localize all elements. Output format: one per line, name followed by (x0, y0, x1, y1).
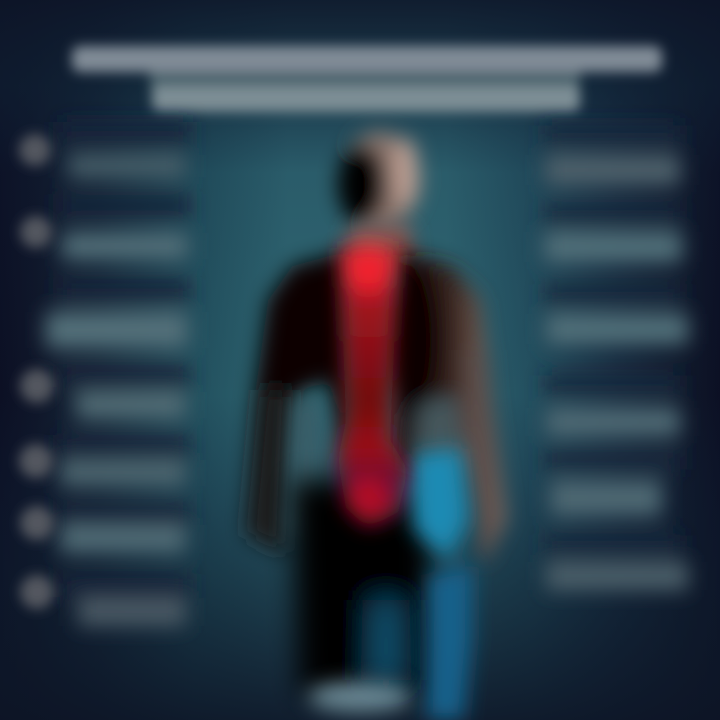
torso and arms (246, 248, 506, 565)
feet (308, 682, 412, 712)
left arm outer (246, 390, 292, 555)
left shoulder and torso (246, 250, 350, 555)
neck and shoulders (346, 225, 414, 270)
human figure seen from behind (246, 132, 506, 720)
left inner arm gap (288, 395, 322, 540)
right blue leg (412, 448, 472, 720)
left column: list items (46, 122, 190, 626)
right torso dark core (384, 265, 440, 415)
right column: list items (544, 125, 688, 590)
left bullets (19, 134, 54, 609)
band shadows behind left text (60, 122, 190, 597)
right text lines (544, 155, 688, 590)
legs (292, 480, 430, 695)
right inner arm gap (415, 395, 468, 470)
right forearm (466, 350, 502, 560)
title (72, 46, 662, 112)
right shoulder and torso (395, 248, 506, 565)
red spine highlight (338, 244, 408, 528)
left text lines (46, 155, 188, 626)
head (338, 132, 420, 228)
band shadows behind right text (545, 125, 680, 555)
